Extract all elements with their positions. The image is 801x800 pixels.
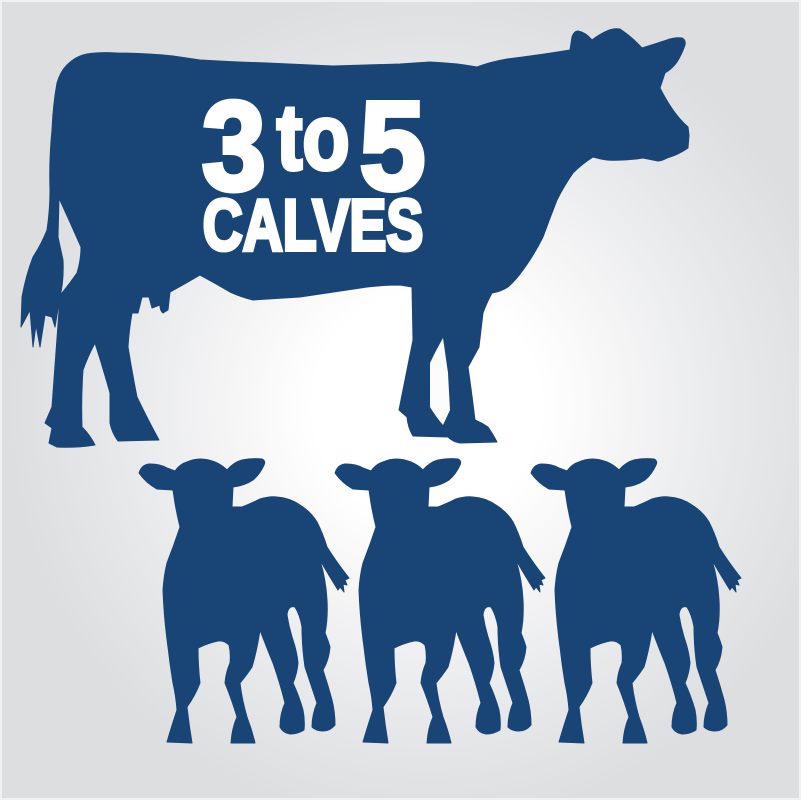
icon: calf 3: [531, 459, 741, 743]
number 5: 5: [360, 76, 426, 216]
word to: to: [277, 85, 350, 189]
number 3: 3: [202, 76, 266, 216]
gap between the front legs: [430, 338, 450, 425]
cow silhouette with text: [21, 29, 689, 447]
icon: adult cow: [21, 29, 689, 447]
word CALVES: CALVES: [203, 186, 423, 266]
icon: calf 1: [139, 459, 349, 743]
headline: [202, 76, 426, 266]
icon: calf 2: [335, 459, 545, 743]
